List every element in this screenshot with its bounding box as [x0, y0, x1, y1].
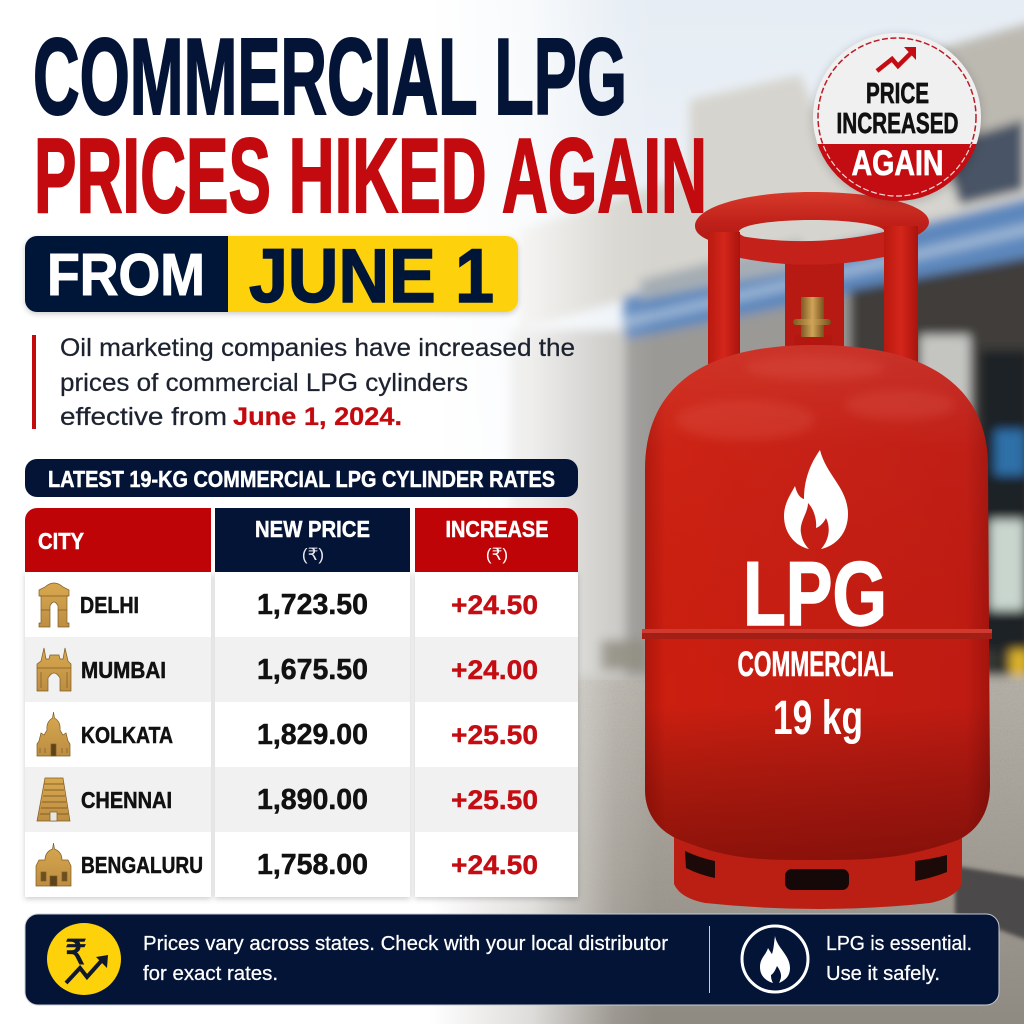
- row: Mumbai: [37, 648, 538, 691]
- date banner: JUNE 1: [249, 234, 494, 319]
- cylinder body: [645, 345, 990, 860]
- icon: Victoria Memorial: [37, 712, 70, 756]
- row: Kolkata: KOLKATA: [81, 722, 173, 748]
- badge: price increased again: PRICE: [866, 78, 929, 110]
- top handle ring: [695, 192, 929, 252]
- intro paragraph: June 1, 2024.: [233, 403, 402, 431]
- badge: price increased again: [810, 30, 985, 204]
- row: Bengaluru: [36, 843, 538, 886]
- intro paragraph: prices of commercial LPG cylinders: [60, 369, 468, 397]
- icon: temple gopuram: [37, 778, 70, 821]
- table heading: LATEST 19-KG COMMERCIAL LPG CYLINDER RATES: [48, 466, 555, 492]
- header: city: CITY: [38, 528, 84, 554]
- footer note: [143, 933, 668, 985]
- dome highlight: [675, 356, 955, 440]
- intro paragraph: [32, 334, 575, 431]
- icon: rupee rising: ₹: [65, 934, 87, 972]
- badge: price increased again: INCREASED: [836, 108, 958, 140]
- title: COMMERCIAL LPG: [33, 16, 627, 138]
- icon: rupee rising: [47, 923, 121, 995]
- center handle post: [785, 262, 844, 352]
- header: new price: [215, 508, 410, 572]
- row: Kolkata: [37, 712, 538, 756]
- row: Mumbai: 1,675.50: [257, 654, 368, 686]
- cylinder label LPG: LPG: [743, 544, 887, 645]
- row: Chennai: [37, 778, 538, 821]
- row: Mumbai: +24.00: [451, 655, 538, 685]
- date banner: [25, 234, 518, 319]
- table column backgrounds: [25, 572, 578, 897]
- icon: rising arrow: [877, 47, 916, 71]
- icon: flame in circle: [742, 926, 808, 992]
- row: Delhi: 1,723.50: [257, 589, 368, 621]
- row: Delhi: DELHI: [80, 592, 139, 618]
- row: Bengaluru: BENGALURU: [81, 852, 203, 878]
- title: [33, 16, 707, 235]
- row: Chennai: CHENNAI: [81, 787, 172, 813]
- header: increase: INCREASE: [446, 516, 548, 542]
- safety note: [826, 933, 972, 985]
- body seam: [642, 629, 992, 639]
- header: increase: (₹): [486, 545, 508, 564]
- footer note: for exact rates.: [143, 963, 278, 985]
- row: Bengaluru: +24.50: [451, 850, 538, 880]
- cylinder label 19 kg: 19 kg: [773, 692, 863, 745]
- row: Bengaluru: 1,758.00: [257, 849, 368, 881]
- cylinder foot ring: [674, 825, 962, 909]
- header: new price: (₹): [302, 545, 324, 564]
- alternating rows: [25, 637, 578, 832]
- icon: Vidhana Soudha: [36, 843, 71, 886]
- row: Chennai: 1,890.00: [257, 784, 368, 816]
- safety note: LPG is essential.: [826, 933, 972, 955]
- LPG cylinder: [642, 192, 992, 909]
- footer bar: [25, 914, 999, 1005]
- safety note: Use it safely.: [826, 963, 940, 985]
- row: Kolkata: +25.50: [451, 720, 538, 750]
- header: new price: NEW PRICE: [255, 516, 370, 542]
- row: Delhi: [39, 583, 538, 627]
- front handle posts: [708, 226, 918, 364]
- back handle ring: [740, 232, 884, 265]
- intro paragraph: Oil marketing companies have increased the: [60, 334, 575, 362]
- valve: [793, 297, 832, 347]
- footer note: Prices vary across states. Check with your local distributor: [143, 933, 668, 955]
- badge: price increased again: AGAIN: [852, 144, 944, 183]
- row: Chennai: +25.50: [451, 785, 538, 815]
- icon: Gateway of India: [37, 648, 71, 691]
- header: increase: [415, 508, 578, 572]
- row: Kolkata: 1,829.00: [257, 719, 368, 751]
- row: Mumbai: MUMBAI: [81, 657, 166, 683]
- intro paragraph: effective from: [60, 403, 227, 431]
- row: Delhi: +24.50: [451, 590, 538, 620]
- icon: flame on cylinder: [784, 450, 848, 549]
- cylinder label Commercial: COMMERCIAL: [738, 645, 894, 684]
- price table: [25, 508, 578, 897]
- table heading: [25, 459, 578, 497]
- icon: India Gate: [39, 583, 69, 627]
- header: city: [25, 508, 211, 572]
- date banner: FROM: [47, 242, 205, 308]
